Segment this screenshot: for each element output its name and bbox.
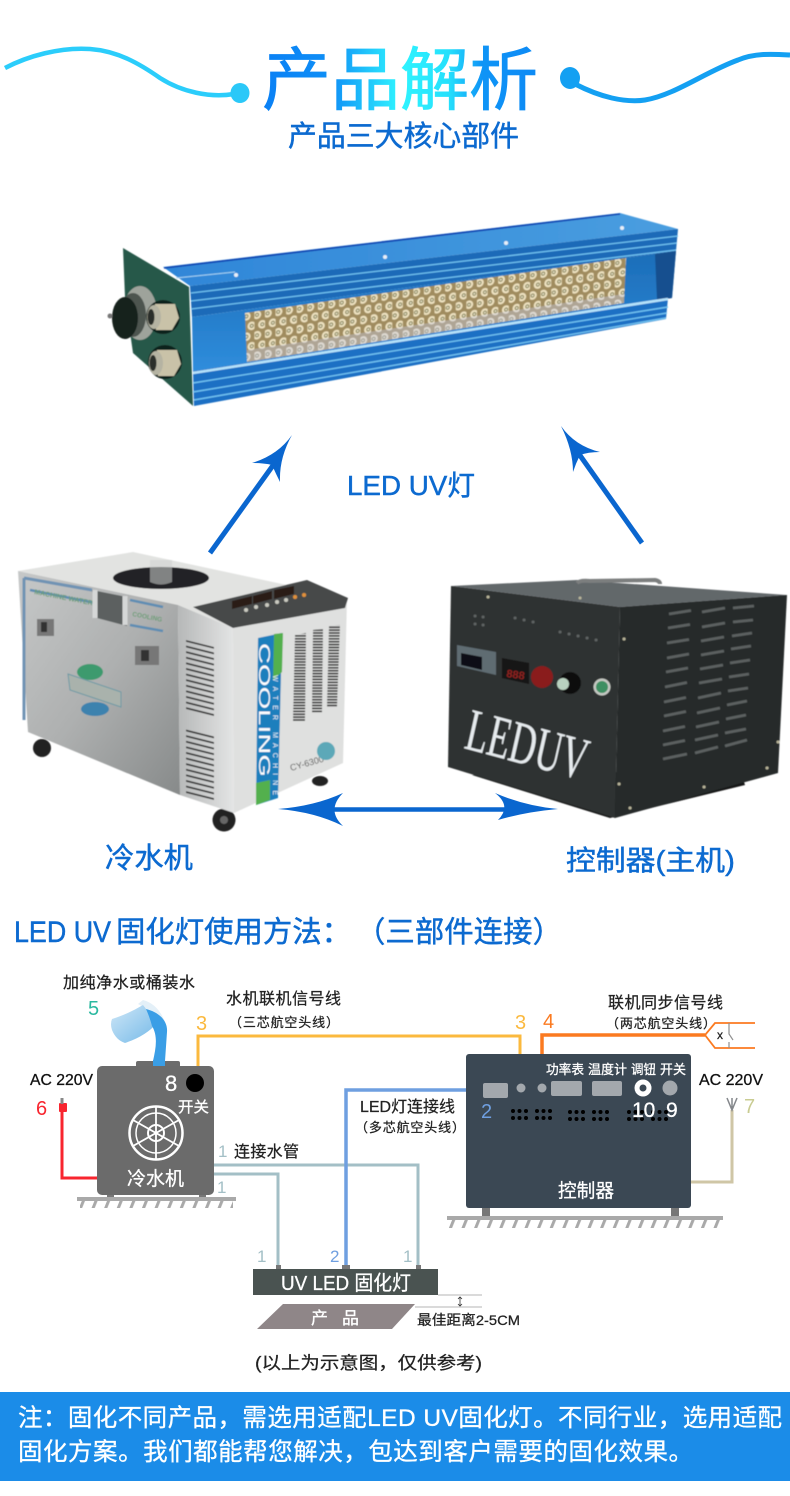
lid handle (92, 590, 127, 626)
pipe and cable labels: 1 (218, 1142, 227, 1161)
pipe and cable labels: 连接水管 (234, 1143, 299, 1161)
wheels (33, 739, 328, 832)
pipe and cable labels: 1 (403, 1247, 412, 1266)
product plate: 产 品 (311, 1309, 359, 1328)
base (472, 770, 745, 818)
lamp top face (163, 213, 678, 286)
UV LED curing lamp: UV LED 固化灯 (281, 1272, 411, 1295)
red knob (531, 666, 553, 688)
diagram note: (以上为示意图，仅供参考) (255, 1353, 482, 1373)
front face (448, 586, 620, 818)
controller unit: 调钮 (631, 1062, 656, 1077)
photo: LED UV lamp (108, 213, 678, 406)
section heading: LED UV (14, 916, 111, 949)
arrow: chiller to lamp (210, 435, 292, 553)
bottom note banner: 注：固化不同产品，需选用适配LED UV固化灯。不同行业，选用适配 (18, 1404, 782, 1432)
bottom note banner (0, 1392, 790, 1481)
power cable controller (691, 1098, 737, 1182)
distance marker: 最佳距离2-5CM (417, 1312, 520, 1328)
water pitcher (111, 1000, 167, 1061)
front label band (24, 578, 163, 720)
pipe and cable labels: 7 (744, 1096, 755, 1118)
right face (233, 598, 347, 813)
power display (502, 658, 529, 684)
cooling stripe (255, 633, 283, 805)
double arrow: chiller and controller (278, 793, 558, 826)
connector: round knob (108, 286, 157, 340)
pipe and cable labels: 6 (36, 1098, 47, 1120)
controller unit: 温度计 (588, 1062, 627, 1077)
screw holes (236, 228, 622, 275)
chiller unit: 开关 (178, 1099, 209, 1116)
chiller ground (77, 1194, 236, 1208)
right face (615, 595, 787, 818)
controller unit: 9 (666, 1099, 678, 1122)
upper rail (190, 229, 678, 317)
pipe and cable labels: 1 (217, 1178, 226, 1197)
controller unit: 控制器 (558, 1180, 614, 1202)
pipe and cable labels: 2 (481, 1101, 492, 1123)
controller unit: 功率表 (546, 1062, 584, 1077)
temperature controller (457, 645, 496, 675)
top face (451, 580, 787, 607)
window (192, 251, 676, 371)
front label band: COOLING (132, 611, 163, 624)
side vents (186, 640, 214, 802)
lower rail (193, 298, 668, 406)
front face (18, 571, 180, 795)
cooling stripe: WATER MACHINE (271, 675, 278, 795)
pipe and cable labels: 4 (543, 1011, 554, 1033)
handle (577, 580, 660, 584)
right vents (293, 625, 340, 721)
power display: 888 (506, 668, 525, 683)
dark control panel (193, 580, 348, 628)
connector: metal nut upper (146, 300, 180, 334)
pipe and cable labels: LED灯连接线 (360, 1098, 455, 1116)
LED cable (346, 1090, 486, 1266)
green end plate (123, 248, 193, 406)
front label band: MACHINE WATER (34, 589, 93, 607)
digital displays (232, 586, 304, 610)
fan grille (130, 1106, 182, 1160)
controller unit: 开关 (660, 1062, 686, 1077)
water inlet (113, 560, 209, 589)
panel indicator lights (475, 616, 596, 640)
section heading: 固化灯使用方法： (116, 916, 351, 949)
green button (594, 678, 610, 696)
controller ground (447, 1208, 723, 1228)
sync cable (542, 1023, 755, 1088)
model mark: CY-6300 (289, 754, 325, 773)
label: chiller: 冷水机 (105, 842, 193, 875)
pipe and cable labels: AC 220V (699, 1072, 763, 1089)
black dial (557, 672, 581, 694)
photo: LED UV controller (448, 580, 787, 818)
pipe and cable labels: 3 (515, 1012, 526, 1034)
power cable chiller (59, 1098, 97, 1178)
product plate (257, 1304, 415, 1329)
chiller unit (97, 1060, 214, 1195)
label: controller: 控制器(主机) (566, 845, 735, 876)
sync cable: x (717, 1028, 723, 1042)
pipe and cable labels: 水机联机信号线 (226, 990, 341, 1008)
label: LED UV lamp: LED UV灯 (347, 470, 475, 501)
pipe and cable labels: 2 (330, 1247, 339, 1266)
pipe and cable labels: （三芯航空头线） (229, 1015, 339, 1030)
wiring diagram (30, 974, 763, 1329)
photo: water chiller (18, 552, 348, 832)
pipe and cable labels (30, 974, 763, 1266)
screws (488, 597, 778, 808)
LEDUV letters: LEDUV (460, 697, 595, 793)
louvers (663, 606, 754, 759)
section heading: （三部件连接） (356, 916, 562, 949)
groove on top (164, 214, 620, 278)
pipe and cable labels: 1 (257, 1247, 266, 1266)
chiller unit: 8 (165, 1071, 177, 1096)
chiller unit: 冷水机 (127, 1168, 184, 1190)
pipe and cable labels: （多芯航空头线） (355, 1120, 465, 1135)
section heading (14, 916, 562, 949)
pipe and cable labels: 联机同步信号线 (608, 994, 723, 1012)
top face (18, 552, 347, 628)
pipe and cable labels: 5 (88, 998, 99, 1020)
water pipes (213, 1165, 418, 1266)
arrow: controller to lamp (561, 426, 642, 543)
pipe and cable labels: AC 220V (30, 1072, 93, 1089)
left wave decoration (5, 49, 250, 103)
cooling stripe: COOLING (255, 643, 272, 777)
latches (37, 619, 159, 665)
UV LED curing lamp (253, 1265, 438, 1295)
controller unit: 10 (632, 1099, 655, 1122)
title: 产品解析 (262, 42, 538, 119)
controller unit (466, 1054, 691, 1208)
connector: metal nut lower (148, 345, 182, 379)
pipe and cable labels: 3 (196, 1013, 207, 1035)
right wave decoration (560, 54, 790, 101)
dark window end (655, 251, 676, 300)
pipe and cable labels: （两芯航空头线） (606, 1016, 716, 1031)
logo (68, 664, 121, 716)
corner panel (178, 605, 234, 813)
bottom note banner: 固化方案。我们都能帮您解决，包达到客户需要的固化效果。 (18, 1438, 693, 1466)
subtitle: 产品三大核心部件 (288, 120, 519, 153)
signal cable (198, 1036, 520, 1088)
distance marker (415, 1295, 520, 1328)
model mark (289, 742, 335, 773)
LED array (245, 258, 626, 362)
vent dots (513, 1111, 669, 1119)
pipe and cable labels: 加纯净水或桶装水 (63, 974, 195, 992)
